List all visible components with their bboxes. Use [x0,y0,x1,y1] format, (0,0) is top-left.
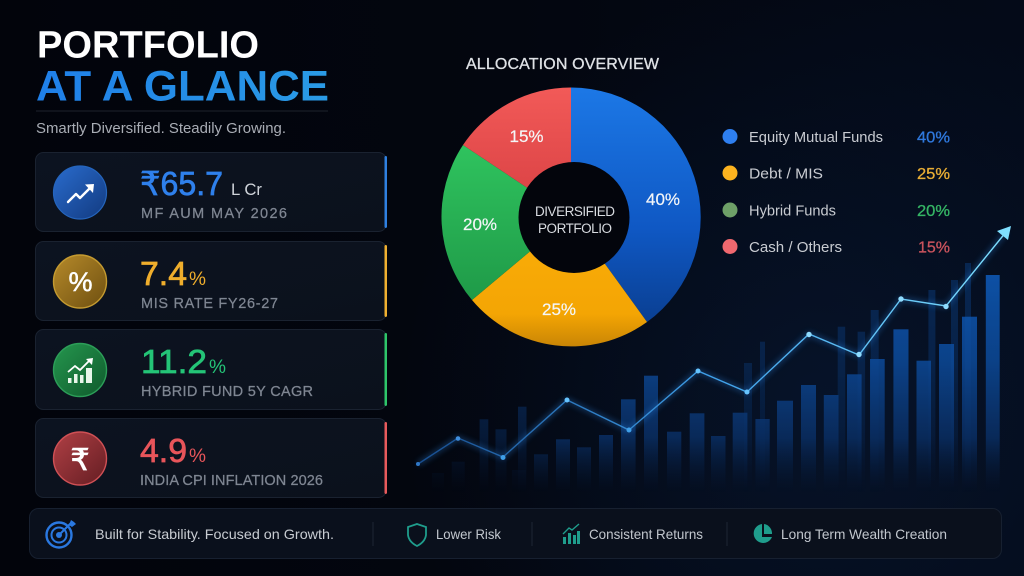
label: MF AUM MAY 2026 [141,206,287,222]
slice: hybrid 20% [441,145,571,300]
stat card: Hybrid fund [36,330,387,410]
icon: growth chart [563,524,580,544]
stat card: MIS rate [36,242,387,320]
slice: equity 40% [571,87,701,322]
slice labels: 25% [542,300,576,319]
label: HYBRID FUND 5Y CAGR [141,384,313,400]
value [140,255,206,292]
icon: shield [408,524,426,546]
stat card: CPI inflation [36,418,387,498]
slice labels: 20% [463,215,497,234]
legend row: equity [722,129,950,146]
subtitle: Smartly Diversified. Steadily Growing. [36,121,286,137]
icon: bars and arrow [54,344,106,396]
icon: trending up arrow [54,166,106,219]
value: % [189,269,206,290]
section heading: allocation overview: ALLOCATION OVERVIEW [466,56,660,73]
center label: DIVERSIFIED [535,204,615,219]
legend row: equity: Equity Mutual Funds [749,130,883,146]
legend row: debt: Debt / MIS [749,166,823,182]
center label: PORTFOLIO [538,221,612,236]
value: % [209,357,226,378]
value [140,432,206,469]
title: PORTFOLIO [37,24,259,66]
center label [535,204,615,236]
item: consistent returns: Consistent Returns [589,526,703,542]
icon: target [46,520,76,548]
value [140,165,262,202]
icon: percent: % [68,267,93,297]
title: AT A GLANCE [36,62,329,110]
stat card: MF AUM [36,152,387,232]
title [36,24,329,110]
legend row: hybrid: 20% [917,203,950,220]
value: 7.4 [140,255,187,292]
legend row: debt: 25% [917,166,950,183]
legend row: hybrid: Hybrid Funds [749,204,836,220]
item: lower risk: Lower Risk [436,526,502,542]
footer bar [30,508,1002,558]
label: INDIA CPI INFLATION 2026 [140,473,323,489]
slice labels [463,127,680,319]
legend row: equity: 40% [917,130,950,146]
icon: percent [54,255,106,308]
icon: rupee: ₹ [70,444,90,477]
slice: debt 25% [472,217,647,346]
slice labels: 40% [646,190,680,209]
center hole [518,162,630,273]
legend row: cash [722,239,950,256]
legend row: debt [722,166,950,183]
tagline: Built for Stability. Focused on Growth. [95,526,334,542]
trend line with arrow [416,226,1011,466]
icon: rupee [54,432,106,485]
value: ₹65.7 [140,165,223,202]
label: MIS RATE FY26-27 [141,296,278,312]
item: long term wealth creation: Long Term Wealth Creation [781,526,947,542]
legend [722,129,950,256]
value: L Cr [231,180,262,199]
legend row: hybrid [722,202,950,220]
slice: cash 15% [463,87,571,217]
value: % [189,446,206,467]
donut chart [441,87,701,346]
bar chart: growth bars [432,263,1000,497]
value: 4.9 [140,432,187,469]
legend row: cash: Cash / Others [749,240,842,256]
icon: pie [754,524,772,543]
legend row: cash: 15% [918,240,950,256]
slice labels: 15% [509,127,544,146]
value: 11.2 [141,343,207,380]
